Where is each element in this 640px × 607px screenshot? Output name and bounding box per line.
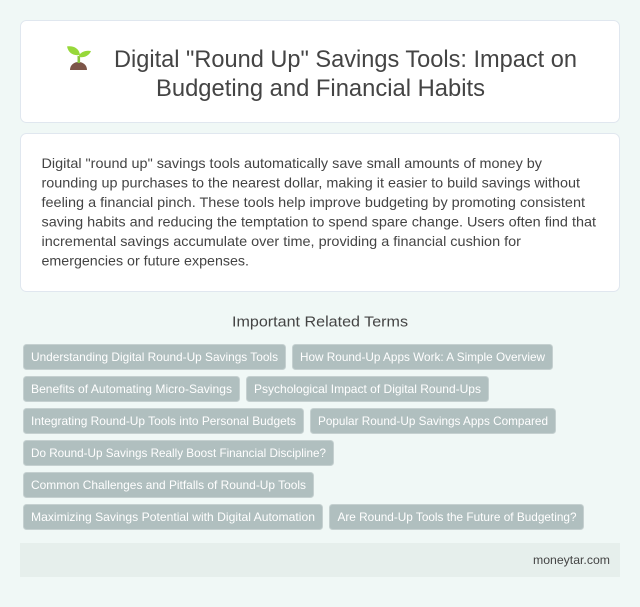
chip — [24, 344, 286, 370]
chip — [246, 376, 488, 402]
description text: incremental savings accumulate over time, providing a financial cushion for — [42, 233, 521, 249]
chip: Do Round-Up Savings Really Boost Financial Discipline? — [31, 446, 326, 460]
icon: sprout — [67, 46, 91, 70]
chip — [24, 440, 334, 466]
chip: How Round-Up Apps Work: A Simple Overview — [300, 350, 545, 364]
footer: moneytar.com — [533, 553, 610, 567]
panel: description card — [20, 134, 620, 292]
description text — [42, 155, 596, 268]
title: Digital "Round Up" Savings Tools: Impact on — [114, 46, 577, 73]
panel: title card — [20, 20, 620, 122]
chip — [292, 344, 552, 370]
description text: saving habits and reducing the temptation to spend spare change. Users often find that — [42, 214, 596, 230]
chip: Benefits of Automating Micro-Savings — [31, 382, 232, 396]
chip — [24, 376, 240, 402]
chip: Maximizing Savings Potential with Digital Automation — [31, 510, 315, 524]
description text: Digital "round up" savings tools automatically save small amounts of money by — [42, 155, 542, 171]
title — [114, 46, 577, 102]
chip — [24, 504, 322, 530]
footer — [20, 543, 620, 577]
chip — [330, 504, 584, 530]
title: Budgeting and Financial Habits — [156, 75, 485, 102]
chip: Are Round-Up Tools the Future of Budgeting? — [338, 510, 577, 524]
heading: important related terms: Important Related Terms — [232, 314, 408, 330]
chip: Psychological Impact of Digital Round-Ups — [254, 382, 481, 396]
chip: Understanding Digital Round-Up Savings Tools — [31, 350, 278, 364]
chip: Common Challenges and Pitfalls of Round-Up Tools — [31, 478, 306, 492]
chip: Integrating Round-Up Tools into Personal Budgets — [31, 414, 296, 428]
chip — [24, 472, 314, 498]
panel: related term chips — [24, 344, 584, 530]
description text: feeling a financial pinch. These tools help improve budgeting by promoting consistent — [42, 194, 585, 210]
description text: emergencies or future expenses. — [42, 252, 249, 268]
description text: rounding up purchases to the nearest dollar, making it easier to build savings without — [42, 174, 580, 190]
chip: Popular Round-Up Savings Apps Compared — [318, 414, 548, 428]
chip — [24, 408, 304, 434]
chip — [310, 408, 556, 434]
